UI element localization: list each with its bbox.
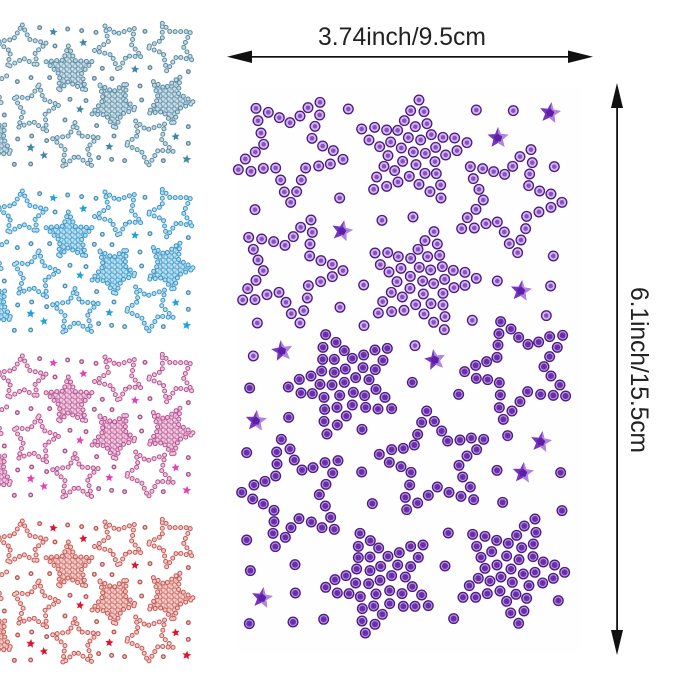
panel: grey-blue sticker sheet bbox=[0, 23, 194, 167]
star outline second row left bbox=[243, 220, 343, 323]
loose round gems upper bbox=[253, 109, 554, 356]
filled star second row bbox=[375, 232, 476, 330]
width label: 3.74inch/9.5cm bbox=[318, 24, 486, 51]
star outline top right bbox=[462, 150, 562, 253]
purple faceted star gems bbox=[245, 101, 562, 608]
star outline fourth row middle bbox=[379, 411, 484, 510]
filled star top middle bbox=[362, 100, 467, 198]
upper purple star gems bbox=[238, 100, 562, 356]
star outline fourth row left bbox=[242, 439, 338, 547]
loose round gems lower bbox=[247, 382, 562, 624]
star outline top left bbox=[238, 102, 343, 202]
panel: red sticker sheet bbox=[0, 519, 194, 663]
arrow: width dimension bbox=[227, 50, 593, 63]
filled star bottom middle bbox=[326, 533, 428, 633]
lower purple star gems bbox=[242, 322, 566, 633]
panel: purple sticker sheet bbox=[238, 88, 580, 652]
filled star bottom right bbox=[463, 519, 565, 623]
panel: pink sticker sheet bbox=[0, 354, 194, 498]
height label: 6.1inch/15.5cm bbox=[625, 287, 652, 453]
arrow: height dimension bbox=[611, 83, 623, 655]
panel: sky-blue sticker sheet bbox=[0, 189, 194, 333]
filled star third row bbox=[288, 335, 392, 434]
star outline third row right bbox=[465, 322, 566, 419]
